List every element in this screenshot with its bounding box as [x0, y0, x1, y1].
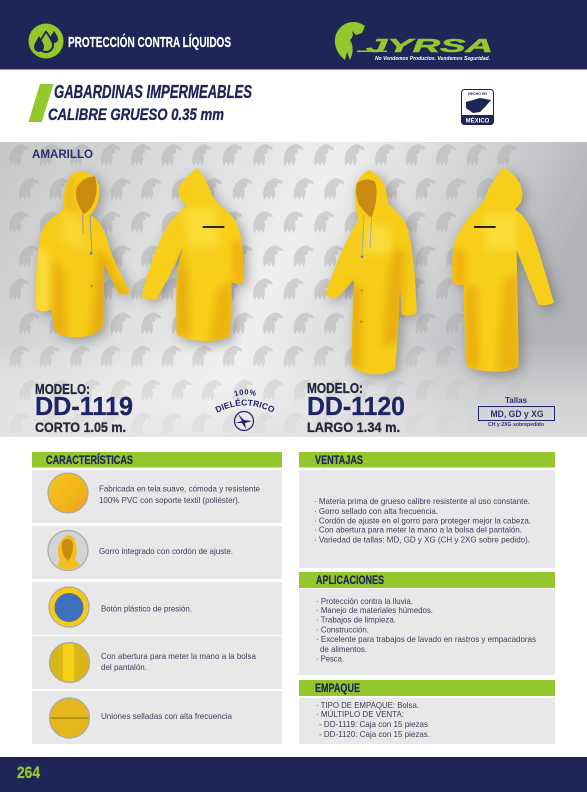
panel: ventajas — [299, 452, 555, 568]
list: empaque: - DD-1119: Caja con 15 piezas — [319, 720, 428, 729]
list: ventajas: · Variedad de tallas: MD, GD y XG (CH y 2XG sobre pedido). — [314, 535, 530, 544]
heading: características — [32, 452, 282, 468]
logo: JYRSA: JYRSA — [366, 36, 493, 56]
heading: aplicaciones: APLICACIONES — [316, 573, 384, 587]
list: aplicaciones: · Construcción. — [316, 626, 369, 635]
panel: características — [32, 452, 282, 744]
list: empaque — [316, 701, 430, 739]
model DD-1120: LARGO 1.34 m. — [307, 419, 400, 435]
feature: fabric: 100% PVC con soporte textil (poliéster). — [99, 496, 240, 505]
sizes: CH y 2XG sobrepedido — [488, 422, 545, 428]
list: aplicaciones — [316, 597, 536, 664]
feature: fabric — [32, 470, 282, 523]
list: aplicaciones: · Protección contra la lluvia. — [316, 597, 413, 606]
feature: button — [32, 582, 282, 635]
feature: pocket opening: del pantalón. — [101, 663, 147, 672]
raincoat DD-1120 back — [450, 165, 557, 375]
list: ventajas: · Materia prima de grueso calibre resistente al uso constante. — [314, 497, 530, 506]
logo: JYRSA — [335, 22, 493, 62]
model DD-1119: DD-1119 — [35, 391, 133, 421]
badge: 100% dieléctrico — [215, 389, 274, 432]
raincoat DD-1119 back — [138, 167, 247, 344]
heading: características: CARACTERÍSTICAS — [46, 452, 133, 467]
header band — [0, 0, 587, 70]
feature: pocket opening — [32, 636, 282, 689]
list: empaque: - DD-1120: Caja con 15 piezas. — [319, 730, 430, 739]
feature: pocket opening: Con abertura para meter la mano a la bolsa — [101, 652, 256, 661]
product photo panel — [0, 142, 587, 437]
sizes — [478, 396, 554, 428]
sizes: MD, GD y XG — [490, 409, 544, 420]
list: aplicaciones: · Manejo de materiales húmedos. — [316, 606, 433, 615]
list: empaque: · MÚLTIPLO DE VENTA: — [316, 709, 404, 719]
badge: 100% dieléctrico: DIELÉCTRICO — [215, 398, 274, 413]
raincoat DD-1119 front — [30, 167, 137, 343]
list: aplicaciones: · Pesca. — [316, 655, 344, 664]
model DD-1119: MODELO: — [35, 381, 90, 398]
title — [48, 82, 252, 124]
list: aplicaciones: de alimentos. — [320, 645, 367, 654]
title: GABARDINAS IMPERMEABLES — [54, 82, 252, 102]
model DD-1120 — [307, 380, 405, 435]
panel: empaque — [299, 680, 555, 744]
list: aplicaciones: · Excelente para trabajos de lavado en rastros y empacadoras — [316, 635, 536, 644]
icon: liquid drops — [28, 24, 64, 58]
list: ventajas — [314, 497, 531, 544]
raincoat DD-1120 front — [323, 167, 420, 378]
feature: sealed seams: Uniones selladas con alta frecuencia — [101, 712, 232, 721]
heading: empaque: EMPAQUE — [315, 681, 360, 695]
badge: hecho en México — [462, 90, 494, 125]
panel: aplicaciones — [299, 572, 555, 675]
page number: 264 — [17, 763, 40, 782]
model DD-1119 — [35, 381, 133, 435]
feature: hood — [32, 526, 282, 579]
model DD-1120: MODELO: — [307, 380, 363, 397]
title: CALIBRE GRUESO 0.35 mm — [48, 105, 224, 124]
title accent slash — [28, 84, 54, 122]
sizes: Tallas — [505, 396, 528, 405]
footer band — [0, 757, 587, 792]
heading: ventajas: VENTAJAS — [315, 453, 363, 467]
model DD-1119: CORTO 1.05 m. — [35, 419, 126, 435]
feature: sealed seams — [32, 691, 282, 744]
list: ventajas: · Gorro sellado con alta frecuencia. — [314, 507, 438, 516]
category title: PROTECCIÓN CONTRA LÍQUIDOS — [68, 33, 231, 51]
badge: 100% dieléctrico: 100% — [234, 389, 256, 396]
badge: hecho en México: MÉXICO — [466, 116, 490, 124]
feature: fabric: Fabricada en tela suave, cómoda y resistente — [99, 485, 260, 494]
list: ventajas: · Cordón de ajuste en el gorro para proteger mejor la cabeza. — [314, 516, 531, 525]
colour label: AMARILLO — [32, 147, 93, 161]
model DD-1120: DD-1120 — [307, 391, 405, 421]
feature: hood: Gorro integrado con cordón de ajuste. — [99, 547, 233, 556]
badge: hecho en México: HECHO EN — [468, 92, 487, 96]
list: aplicaciones: · Trabajos de limpieza. — [316, 616, 396, 625]
list: empaque: · TIPO DE EMPAQUE: Bolsa. — [316, 701, 419, 710]
feature: button: Botón plástico de presión. — [101, 605, 192, 614]
logo: JYRSA: No Vendemos Productos. Vendemos Seguridad. — [375, 56, 490, 62]
list: ventajas: · Con abertura para meter la mano a la bolsa del pantalón. — [314, 526, 522, 535]
